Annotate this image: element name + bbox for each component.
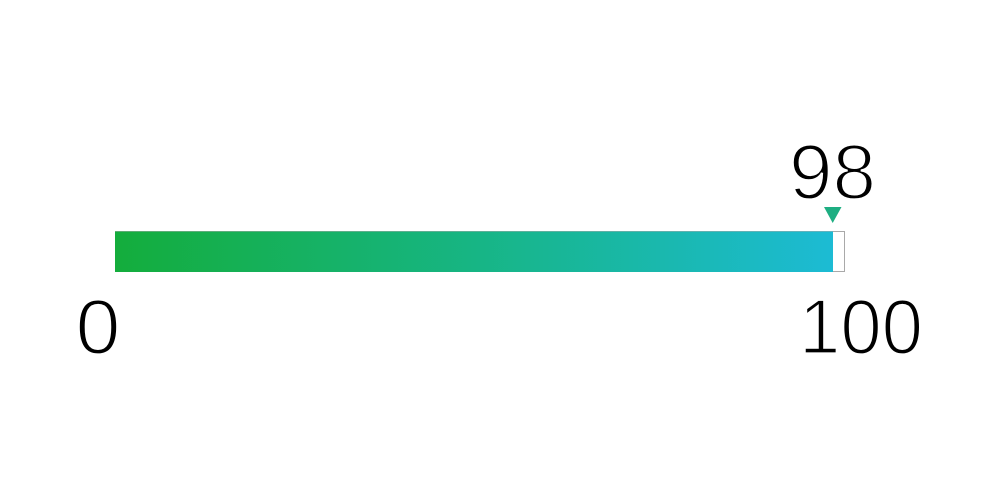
- value label: 98: 98: [789, 128, 876, 216]
- value marker triangle: [824, 207, 842, 223]
- bar gradient fill: [115, 232, 833, 272]
- scale maximum label: 100: 100: [799, 282, 923, 370]
- bar track outline: [116, 232, 844, 272]
- scale minimum label: 0: 0: [76, 282, 120, 370]
